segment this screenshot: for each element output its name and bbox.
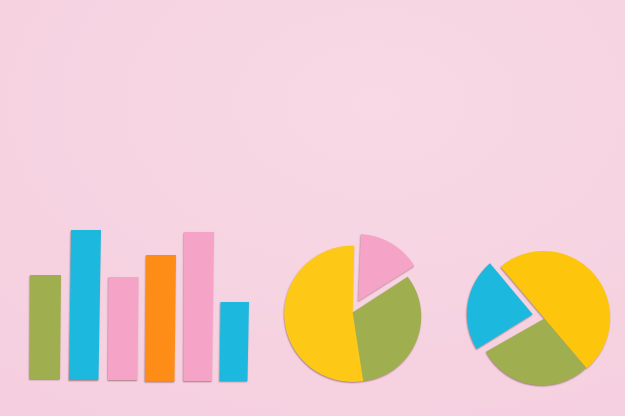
slice: green xyxy=(486,318,586,385)
bar: green xyxy=(30,275,61,379)
bar: tall blue xyxy=(69,230,101,380)
bar: orange xyxy=(145,255,176,382)
bar: pink xyxy=(108,277,138,380)
bar chart xyxy=(30,230,249,382)
slice: pink xyxy=(358,234,414,301)
pie chart: right xyxy=(467,251,610,385)
slice: yellow xyxy=(501,251,610,368)
bar: short blue xyxy=(220,302,249,381)
slice: blue xyxy=(467,263,533,349)
bar: tall pink xyxy=(184,232,214,381)
pie chart: left xyxy=(284,234,421,382)
slice: green xyxy=(353,277,421,381)
slice: yellow xyxy=(284,246,363,382)
